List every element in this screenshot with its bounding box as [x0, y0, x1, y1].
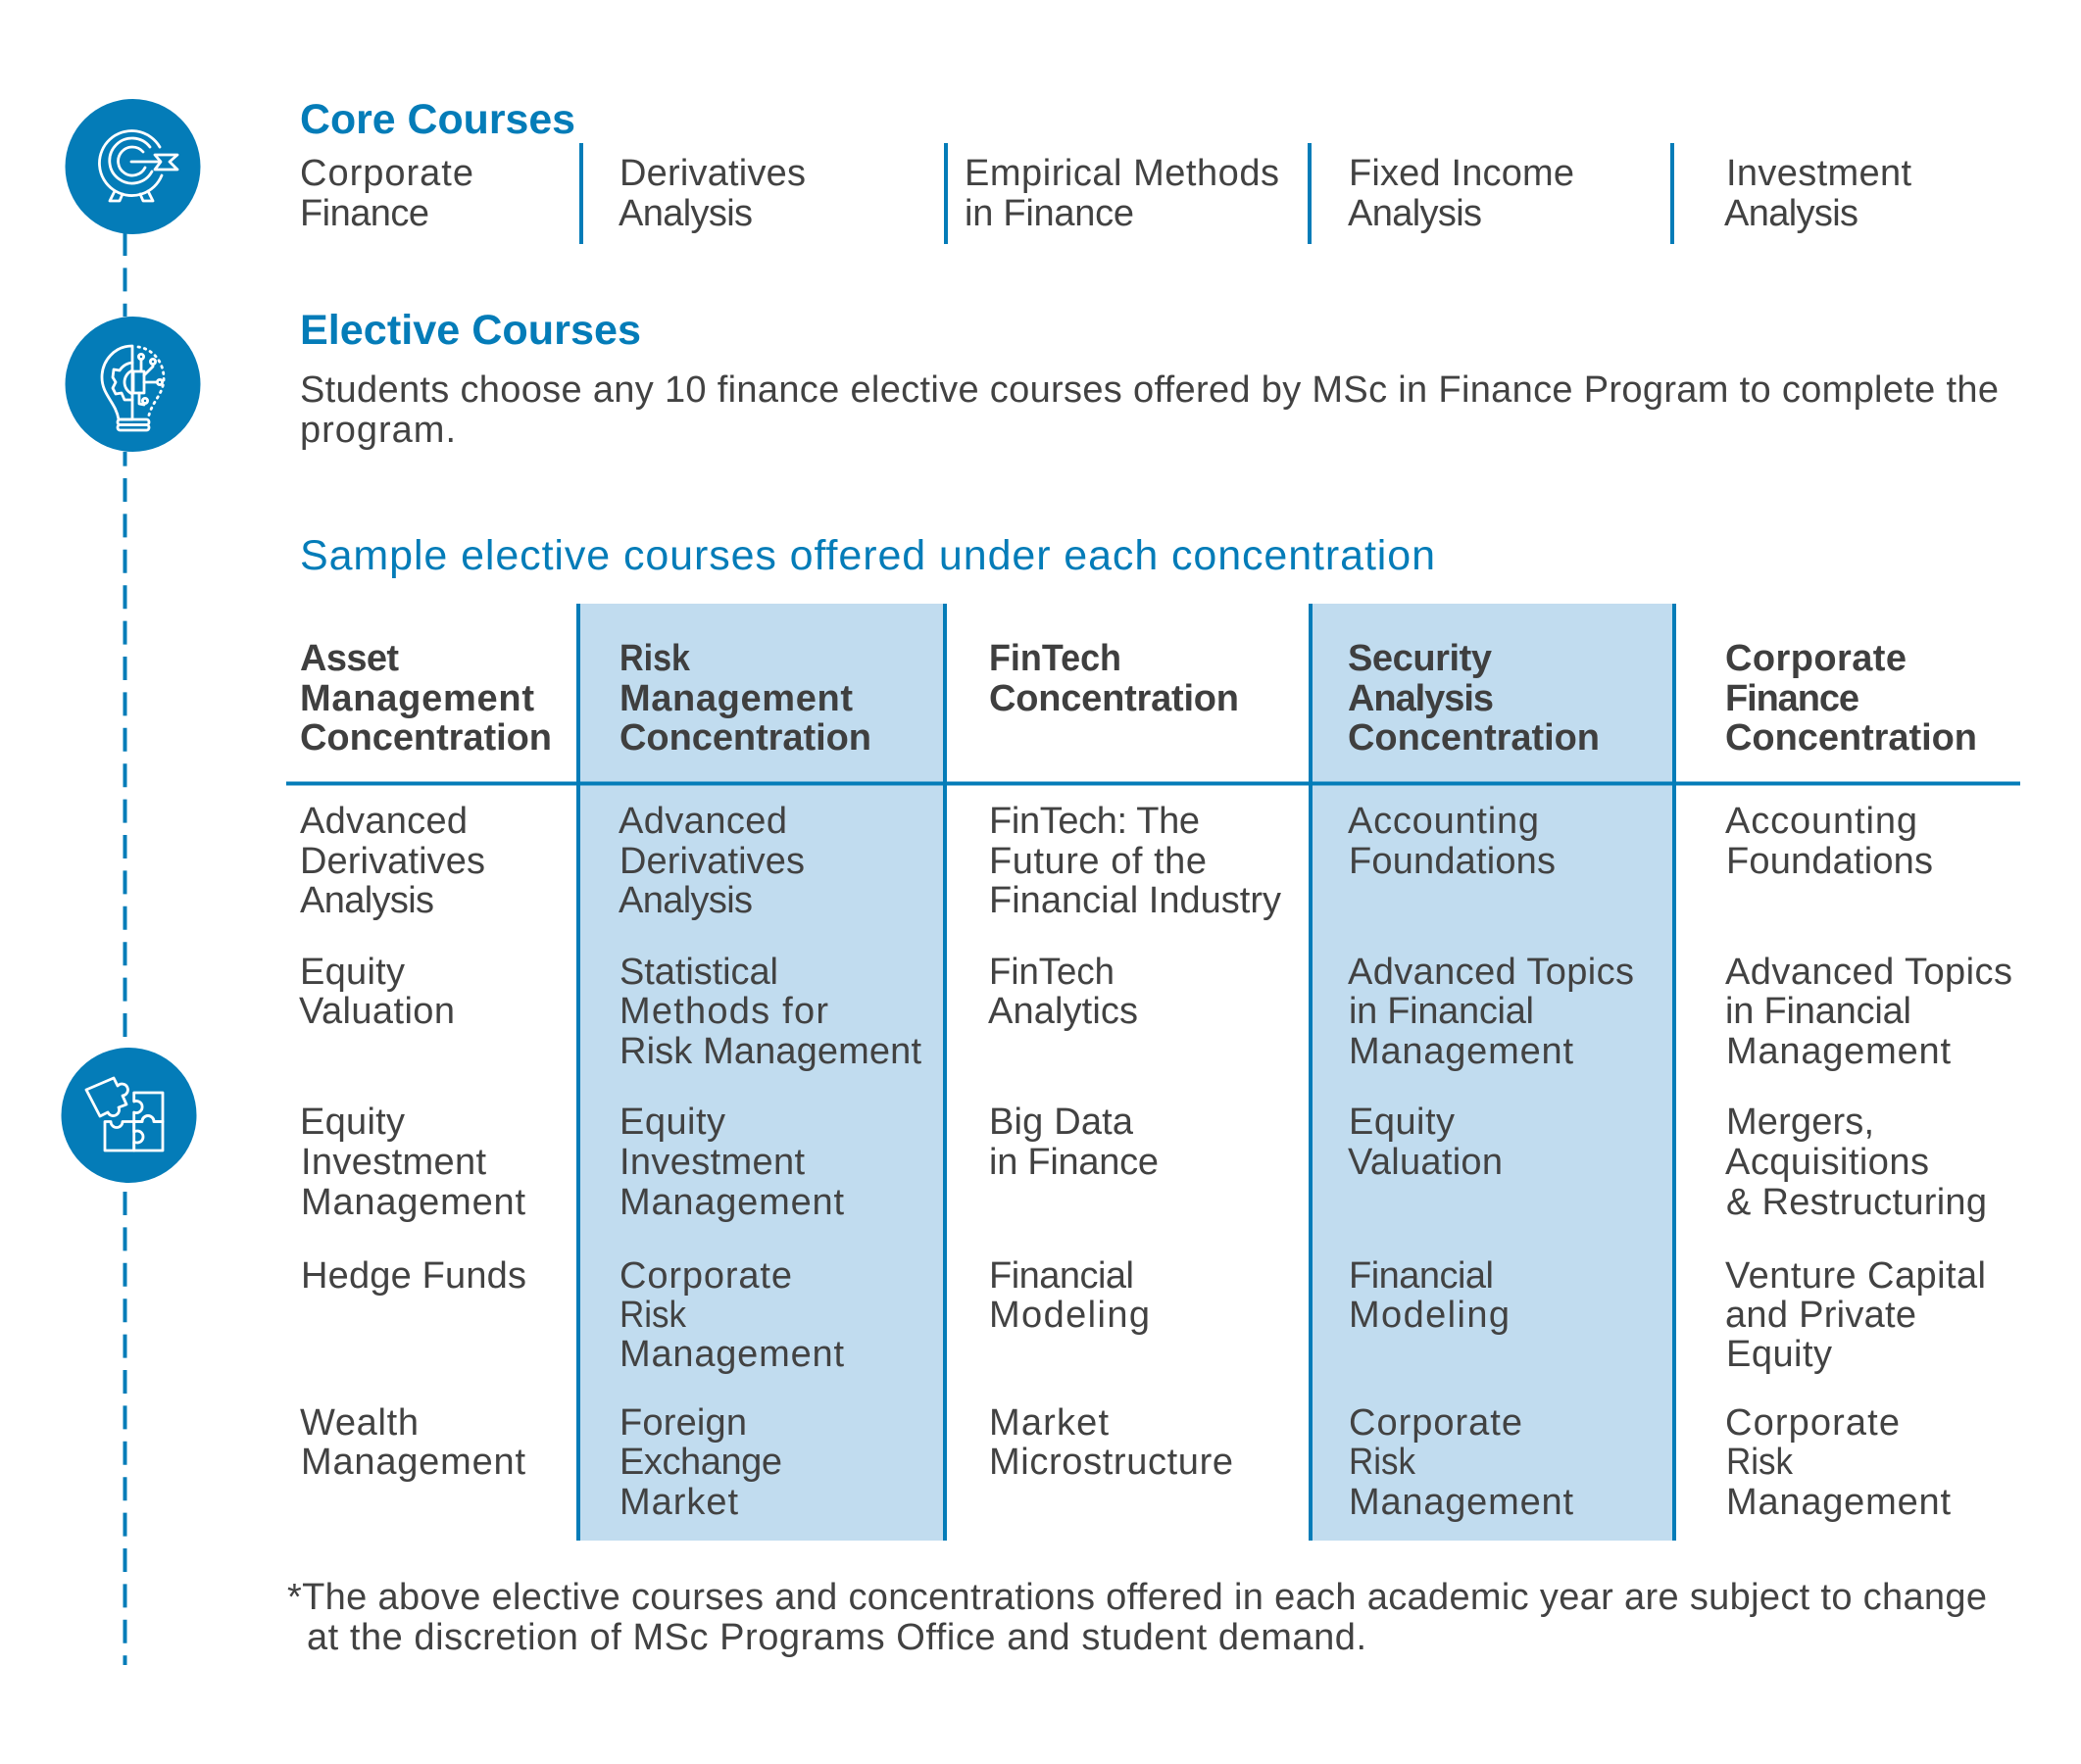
header: Asset Management Concentration: Concentration	[300, 717, 552, 759]
header: FinTech Concentration	[989, 638, 1239, 719]
column: Security Analysis: Equity	[1349, 1102, 1455, 1143]
header: Security Analysis Concentration: Analysis	[1348, 678, 1494, 719]
core course: Empirical Methods in Finance: Empirical Methods	[965, 153, 1279, 194]
column: Risk Management: Analysis	[619, 880, 753, 921]
column: Risk Management: Management	[619, 1182, 844, 1223]
core course: Fixed Income Analysis	[1308, 143, 1574, 244]
header: Security Analysis Concentration: Concentration	[1348, 717, 1600, 759]
core course: Empirical Methods in Finance: in Finance	[965, 193, 1134, 234]
column: FinTech: FinTech	[989, 952, 1115, 993]
header: FinTech Concentration: FinTech	[989, 638, 1121, 679]
core course: Corporate Finance: Finance	[300, 193, 429, 234]
header: Asset Management Concentration: Management	[300, 678, 534, 719]
column: FinTech: Big Data	[989, 1102, 1134, 1143]
icon: target with arrow	[65, 99, 200, 234]
column: Asset Management	[299, 638, 552, 1483]
column: Asset Management: Derivatives	[300, 841, 485, 882]
column: FinTech: Financial Industry	[989, 880, 1281, 921]
column: Corporate Finance: Accounting	[1725, 801, 1917, 842]
column: Asset Management: Valuation	[299, 991, 455, 1032]
column: Corporate Finance: Foundations	[1726, 841, 1933, 882]
column: Security Analysis: Valuation	[1348, 1142, 1503, 1183]
header: Asset Management Concentration	[300, 638, 552, 759]
column: Security Analysis: Corporate	[1349, 1402, 1522, 1444]
column: Asset Management: Investment	[301, 1142, 486, 1183]
column: Risk Management: Derivatives	[619, 841, 805, 882]
column: Asset Management: Advanced	[300, 801, 468, 842]
header: FinTech Concentration: Concentration	[989, 678, 1239, 719]
footnote: at the discretion of MSc Programs Office and student demand.	[307, 1617, 1366, 1658]
column: FinTech: in Finance	[989, 1142, 1159, 1183]
column: FinTech: FinTech: The	[989, 801, 1200, 842]
subheading: sample electives: Sample elective courses offered under each concentration	[300, 532, 1435, 579]
concentration table	[286, 604, 2020, 1541]
column: Asset Management: Management	[301, 1442, 525, 1483]
column: Asset Management: Management	[301, 1182, 525, 1223]
column: Security Analysis: in Financial	[1349, 991, 1534, 1032]
column: Risk Management: Advanced	[619, 801, 787, 842]
core course list	[300, 143, 1911, 244]
column: Corporate Finance: Risk	[1726, 1442, 1794, 1483]
column: Risk Management: Corporate	[619, 1255, 792, 1297]
column: Asset Management: Wealth	[300, 1402, 419, 1444]
column: Corporate Finance: Venture Capital	[1725, 1255, 1986, 1297]
column: Risk Management	[619, 638, 921, 1523]
heading: Core Courses: Core Courses	[300, 96, 575, 143]
core course: Fixed Income Analysis: Analysis	[1348, 193, 1482, 234]
column: Security Analysis: Management	[1349, 1031, 1573, 1072]
column: FinTech: Financial	[989, 1255, 1134, 1297]
column: FinTech	[988, 638, 1281, 1483]
column: Asset Management: Hedge Funds	[301, 1255, 526, 1297]
core course: Derivatives Analysis: Analysis	[619, 193, 753, 234]
column: Security Analysis: Modeling	[1349, 1295, 1510, 1336]
header: Corporate Finance Concentration: Concentration	[1725, 717, 1977, 759]
column: Risk Management: Methods for	[619, 991, 828, 1032]
column: Corporate Finance: Acquisitions	[1725, 1142, 1929, 1183]
column: Corporate Finance	[1725, 638, 2012, 1523]
core course: Corporate Finance: Corporate	[300, 153, 473, 194]
column: Corporate Finance: Management	[1726, 1482, 1951, 1523]
column: Security Analysis: Risk	[1349, 1442, 1416, 1483]
header: Security Analysis Concentration: Security	[1348, 638, 1492, 679]
core course: Investment Analysis: Analysis	[1724, 193, 1858, 234]
elective description: Students choose any 10 finance elective courses offered by MSc in Finance Program to complete the	[300, 369, 1999, 411]
column: Corporate Finance: Corporate	[1725, 1402, 1900, 1444]
core course: Corporate Finance	[300, 153, 473, 234]
core course: Investment Analysis: Investment	[1726, 153, 1911, 194]
column: Risk Management: Foreign	[619, 1402, 747, 1444]
column: Risk Management: Exchange	[619, 1442, 782, 1483]
footnote	[287, 1577, 1987, 1658]
column: Security Analysis: Foundations	[1349, 841, 1556, 882]
column: Corporate Finance: Management	[1726, 1031, 1951, 1072]
header: Corporate Finance Concentration: Corporate	[1725, 638, 1907, 679]
header: Risk Management Concentration: Risk	[619, 638, 691, 679]
header: Corporate Finance Concentration	[1725, 638, 1977, 759]
header: Asset Management Concentration: Asset	[300, 638, 399, 679]
icon: puzzle pieces	[61, 1048, 196, 1183]
header: Risk Management Concentration: Concentration	[619, 717, 871, 759]
column: Corporate Finance: Equity	[1726, 1334, 1832, 1375]
core course: Investment Analysis	[1670, 143, 1911, 244]
column: Corporate Finance: Mergers,	[1726, 1102, 1874, 1143]
dashed timeline connector	[124, 232, 127, 1665]
header: Risk Management Concentration	[619, 638, 871, 759]
core course: Fixed Income Analysis: Fixed Income	[1349, 153, 1574, 194]
column: Security Analysis: Management	[1349, 1482, 1573, 1523]
column: Risk Management: Risk	[619, 1295, 687, 1336]
column: Risk Management: Management	[619, 1334, 844, 1375]
column: FinTech: Analytics	[988, 991, 1138, 1032]
column: Risk Management: Investment	[619, 1142, 805, 1183]
icon: lightbulb with gear and circuit	[65, 317, 200, 452]
column: Corporate Finance: Advanced Topics	[1725, 952, 2012, 993]
highlighted column backgrounds	[286, 604, 2020, 1541]
column: FinTech: Future of the	[989, 841, 1207, 882]
core course: Derivatives Analysis: Derivatives	[619, 153, 806, 194]
column: Security Analysis	[1348, 638, 1634, 1523]
column: Asset Management: Equity	[300, 952, 405, 993]
column: FinTech: Market	[989, 1402, 1109, 1444]
column: Corporate Finance: and Private	[1725, 1295, 1916, 1336]
column: Security Analysis: Advanced Topics	[1348, 952, 1634, 993]
column: Risk Management: Statistical	[619, 952, 778, 993]
column: Corporate Finance: in Financial	[1725, 991, 1911, 1032]
footnote: *The above elective courses and concentrations offered in each academic year are subject to change	[287, 1577, 1987, 1618]
elective description	[300, 369, 1999, 451]
column: Asset Management: Analysis	[300, 880, 434, 921]
heading: Elective Courses: Elective Courses	[300, 307, 641, 354]
column: FinTech: Microstructure	[989, 1442, 1233, 1483]
header: Security Analysis Concentration	[1348, 638, 1600, 759]
core course: Derivatives Analysis	[579, 143, 806, 244]
header: Risk Management Concentration: Management	[619, 678, 853, 719]
elective description: program.	[300, 410, 456, 451]
column: FinTech: Modeling	[989, 1295, 1150, 1336]
column: Asset Management: Equity	[300, 1102, 405, 1143]
column: Security Analysis: Accounting	[1348, 801, 1539, 842]
column: Risk Management: Risk Management	[619, 1031, 921, 1072]
core course: Empirical Methods in Finance	[944, 143, 1279, 244]
column: Security Analysis: Financial	[1349, 1255, 1494, 1297]
column: Risk Management: Market	[619, 1482, 738, 1523]
column: Corporate Finance: & Restructuring	[1726, 1182, 1987, 1223]
header: Corporate Finance Concentration: Finance	[1725, 678, 1859, 719]
column: Risk Management: Equity	[619, 1102, 725, 1143]
